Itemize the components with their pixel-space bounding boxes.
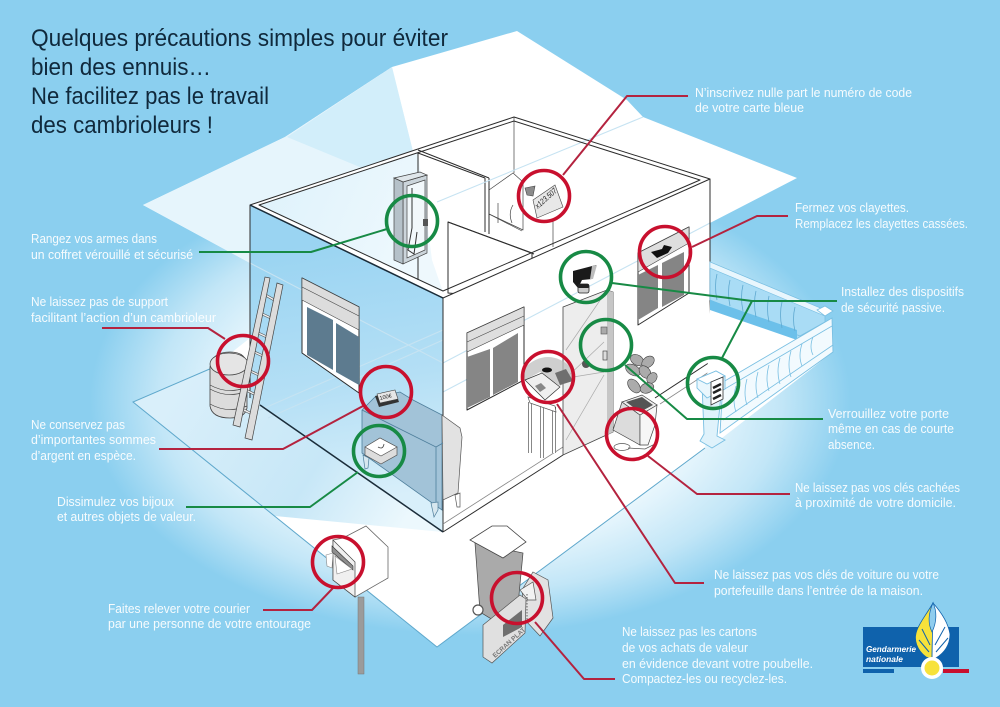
left wall window <box>302 278 359 393</box>
text: card code: de votre carte bleue <box>695 100 804 115</box>
text: passive security <box>841 284 964 315</box>
title: Ne facilitez pas le travail <box>31 83 269 110</box>
leader lines <box>102 96 837 679</box>
right wall <box>443 179 710 532</box>
flat screen box: ECRAN PLAT <box>492 627 527 659</box>
text: lock door: absence. <box>828 437 875 452</box>
interior back room <box>250 117 710 298</box>
barrel and ladder <box>210 277 283 440</box>
card code note: x123.507 <box>533 186 559 211</box>
icon: 100 euro banknotes: 100€ <box>379 393 392 402</box>
text: jewels: et autres objets de valeur. <box>57 509 196 524</box>
plant pot and hidden key <box>613 352 659 450</box>
house <box>250 117 712 532</box>
text: car keys: portefeuille dans l’entrée de la maison. <box>714 583 923 598</box>
icon: jewellery box <box>365 438 397 464</box>
text: ladder <box>31 294 217 325</box>
text: lock door <box>828 406 954 452</box>
title: Quelques précautions simples pour éviter <box>31 25 448 52</box>
cardboard box <box>520 572 553 636</box>
text: passive security: Installez des dispositifs <box>841 284 964 299</box>
text: shutters: Fermez vos clayettes. <box>795 200 909 215</box>
text: card code <box>695 85 912 115</box>
text: weapons <box>31 231 193 262</box>
fridge and counter <box>486 117 553 316</box>
door <box>563 290 613 455</box>
text: cash: d’importantes sommes <box>31 432 156 447</box>
text: car keys <box>714 567 939 598</box>
logo: Gendarmerie nationale: nationale <box>866 655 904 664</box>
text: cash <box>31 417 156 463</box>
sideboard with banknotes and jewellery box <box>362 390 462 517</box>
text: car keys: Ne laissez pas vos clés de voiture ou votre <box>714 567 939 582</box>
text: boxes: en évidence devant votre poubelle. <box>622 656 813 671</box>
logo: Gendarmerie nationale: Gendarmerie <box>866 645 917 654</box>
text: weapons: un coffret vérouillé et sécurisé <box>31 247 193 262</box>
icon: door knob <box>582 360 590 368</box>
roof rim <box>250 117 710 532</box>
mailbox <box>326 526 388 674</box>
text: boxes: Compactez-les ou recyclez-les. <box>622 671 787 686</box>
text: shutters <box>795 200 968 231</box>
icon: warning plate <box>711 377 723 405</box>
text: jewels: Dissimulez vos bijoux <box>57 494 174 509</box>
text: ladder: Ne laissez pas de support <box>31 294 168 309</box>
upper ground plane <box>143 31 797 363</box>
title: bien des ennuis… <box>31 54 211 81</box>
text: passive security: de sécurité passive. <box>841 300 945 315</box>
text: mail: Faites relever votre courier <box>108 601 251 616</box>
faint ground projection lines <box>250 117 710 418</box>
interior partitions <box>418 150 534 300</box>
text: hidden keys <box>795 480 960 510</box>
text: hidden keys: à proximité de votre domicile. <box>795 495 956 510</box>
card code note <box>525 185 563 218</box>
text: ladder: facilitant l’action d’un cambrioleur <box>31 310 217 325</box>
text: cash: d’argent en espèce. <box>31 448 136 463</box>
icon: broken slat <box>651 245 672 258</box>
right wall window with shutter <box>638 227 689 325</box>
gate post with warning sign <box>697 371 725 448</box>
rifle cabinet <box>394 172 428 264</box>
text: lock door: Verrouillez votre porte <box>828 406 949 421</box>
text: boxes <box>622 624 813 686</box>
logo: Gendarmerie nationale <box>863 603 969 679</box>
text: lock door: même en cas de courte <box>828 421 954 436</box>
text: jewels <box>57 494 196 524</box>
front wall window <box>467 307 524 410</box>
text: card code: N’inscrivez nulle part le numéro de code <box>695 85 912 100</box>
text: mail: par une personne de votre entourage <box>108 616 311 631</box>
text: hidden keys: Ne laissez pas vos clés cachées <box>795 480 960 495</box>
left wall <box>250 205 443 532</box>
title <box>31 25 448 139</box>
trash bin and boxes <box>470 526 553 663</box>
text: mail <box>108 601 311 631</box>
terrace balustrade <box>705 262 833 445</box>
icon: lock <box>601 327 607 334</box>
text: cash: Ne conservez pas <box>31 417 125 432</box>
highlight circles <box>218 170 738 624</box>
title: des cambrioleurs ! <box>31 112 213 139</box>
lower ground plane <box>133 300 725 647</box>
text: shutters: Remplacez les clayettes cassées. <box>795 216 968 231</box>
text: weapons: Rangez vos armes dans <box>31 231 157 246</box>
text: boxes: de vos achats de valeur <box>622 640 749 655</box>
security lamp <box>573 265 597 293</box>
hall table with telephone and keys <box>524 357 573 458</box>
text: boxes: Ne laissez pas les cartons <box>622 624 757 639</box>
